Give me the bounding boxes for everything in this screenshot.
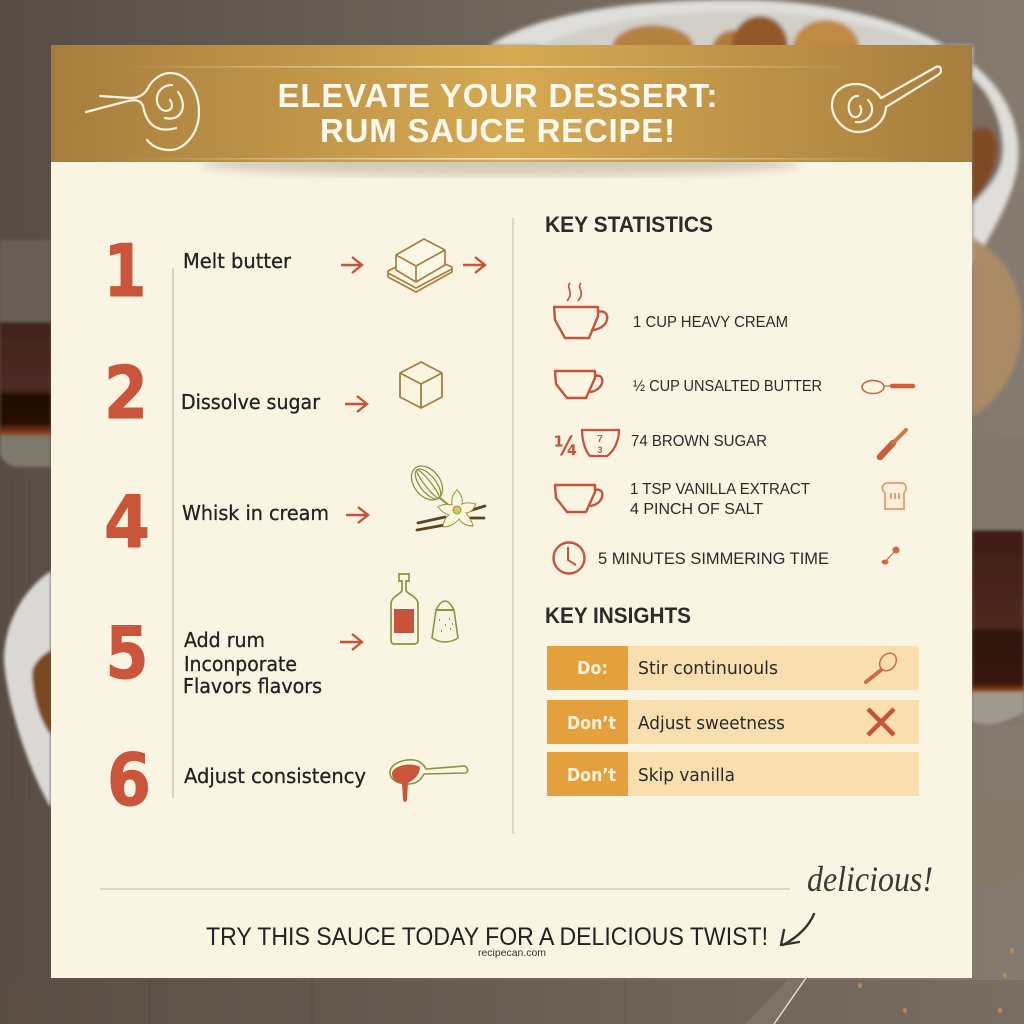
- stat: vanilla and salt: 4 PINCH OF SALT: [630, 501, 763, 518]
- footer: [100, 859, 933, 959]
- panel: numbered steps: [104, 229, 485, 822]
- background: crumbs: [860, 950, 1012, 1011]
- step 2: 2: [104, 351, 148, 435]
- stat: simmering time: 5 MINUTES SIMMERING TIME: [598, 549, 829, 568]
- icon: butter: [388, 239, 452, 292]
- title: RUM SAUCE RECIPE!: [320, 112, 675, 149]
- row: do: [547, 646, 919, 690]
- step 6: 6: [107, 738, 151, 822]
- stat: simmering time: [554, 542, 900, 574]
- icon: sugar cube: [400, 362, 442, 408]
- arrow: [781, 914, 814, 945]
- icon: spoon: [862, 380, 913, 394]
- stat: vanilla and salt: 1 TSP VANILLA EXTRACT: [630, 481, 810, 498]
- title: [278, 77, 718, 149]
- stat: brown sugar: [554, 430, 906, 462]
- row: do: Do:: [577, 658, 608, 679]
- background: wooden board: [972, 238, 1022, 416]
- row: dont adjust: [547, 700, 919, 744]
- background: spoon: [973, 794, 1024, 890]
- icon: left swirl spoon: [86, 73, 199, 150]
- step 1: [104, 229, 485, 313]
- icon: steaming cup: [554, 283, 607, 338]
- stat: butter: ½ CUP UNSALTED BUTTER: [633, 378, 822, 395]
- step 5: 5: [106, 611, 148, 695]
- background: left ramekin: [4, 571, 51, 808]
- step 5: Flavors flavors: [183, 674, 322, 698]
- watermark: recipecan.com: [478, 948, 546, 959]
- icon: whisk and vanilla: [405, 460, 485, 530]
- row: dont skip: Don’t: [567, 765, 616, 786]
- step 1: 1: [104, 229, 146, 313]
- row: dont skip: Skip vanilla: [638, 765, 735, 786]
- stat: butter: [555, 371, 913, 398]
- icon: cup: [555, 485, 602, 512]
- icon: rum bottle: [391, 574, 418, 644]
- handwritten note: delicious!: [807, 859, 933, 899]
- icon: spatula: [880, 430, 906, 457]
- icon: quarter fraction: ¼: [554, 431, 578, 462]
- step 1: Melt butter: [183, 249, 292, 273]
- heading: KEY INSIGHTS: [545, 603, 691, 628]
- step 4: Whisk in cream: [182, 501, 329, 525]
- step 2: Dissolve sugar: [181, 390, 321, 414]
- panel: key statistics: [545, 212, 913, 574]
- step 5: [106, 574, 458, 698]
- step 6: [107, 738, 468, 822]
- step 5: Add rum: [184, 628, 265, 652]
- icon: spoon with sauce: [390, 760, 468, 802]
- panel: key insights: [545, 603, 919, 796]
- step 6: Adjust consistency: [184, 764, 366, 788]
- icon: measuring cup: [582, 430, 619, 456]
- background: left glass of rum: [0, 240, 51, 468]
- icon: cup: [555, 371, 602, 398]
- stat: heavy cream: [554, 283, 788, 338]
- stat: brown sugar: 74 BROWN SUGAR: [631, 433, 767, 450]
- icon: cross: [868, 709, 894, 735]
- center divider: [512, 218, 514, 834]
- icon: measuring cup: 7: [597, 434, 603, 445]
- row: dont adjust: Adjust sweetness: [638, 713, 785, 734]
- stat: heavy cream: 1 CUP HEAVY CREAM: [633, 314, 788, 331]
- vertical divider: [172, 268, 174, 798]
- row: dont skip: [547, 752, 919, 796]
- title: ELEVATE YOUR DESSERT:: [278, 77, 718, 114]
- header banner: [51, 45, 972, 162]
- icon: spoon: [866, 650, 900, 682]
- icon: toast: [882, 483, 906, 509]
- step 4: [104, 460, 485, 564]
- icon: clock: [554, 542, 584, 574]
- row: do: Stir continuıouls: [638, 658, 778, 679]
- step 5: Inconporate: [184, 652, 297, 676]
- icon: right swirl spoon: [832, 66, 941, 132]
- decorative header shadow: [200, 152, 800, 176]
- background: right glass of rum: [972, 438, 1024, 725]
- step 4: 4: [104, 480, 150, 564]
- background: top bowl: [488, 0, 1018, 268]
- icon: salt shaker: [432, 601, 458, 642]
- row: dont adjust: Don’t: [567, 713, 616, 734]
- stat: vanilla and salt: [555, 481, 906, 518]
- icon: measuring cup: 3: [597, 445, 603, 455]
- heading: KEY STATISTICS: [545, 212, 713, 237]
- call to action: TRY THIS SAUCE TODAY FOR A DELICIOUS TWIST!: [206, 923, 768, 951]
- background: bottom utensil: [745, 978, 806, 1024]
- step 2: [104, 351, 442, 435]
- icon: small spoon: [882, 546, 900, 564]
